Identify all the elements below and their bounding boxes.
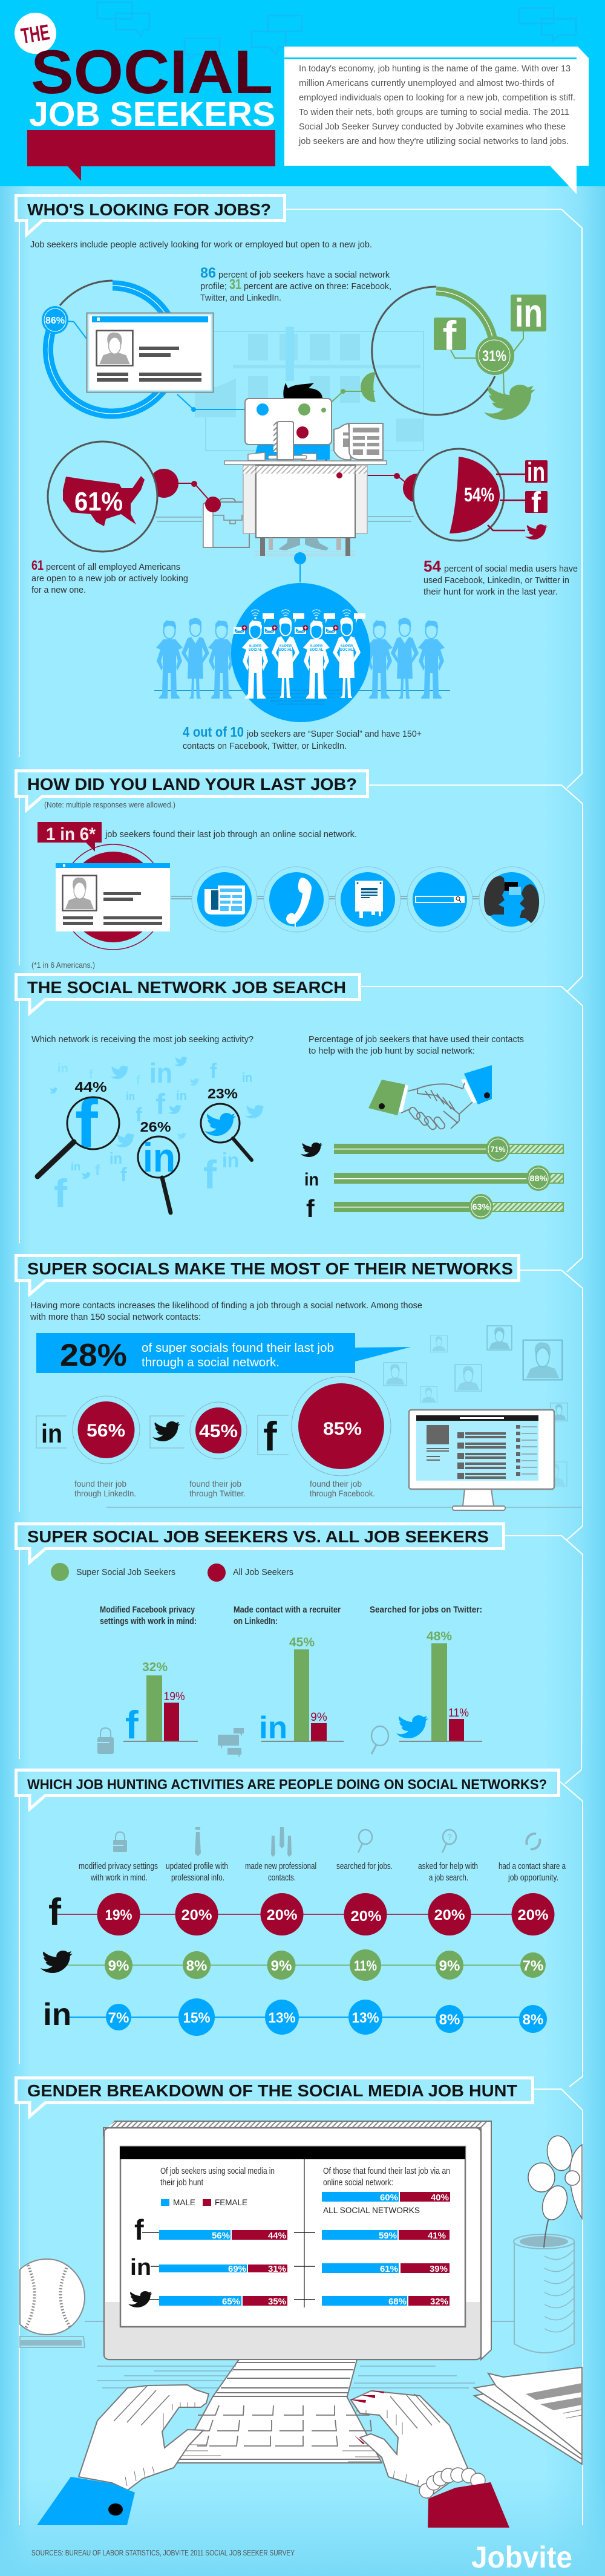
screen copy left — [160, 2167, 275, 2188]
title: the social job seekers: THE — [19, 19, 51, 48]
activity labels: professional info. — [171, 1873, 224, 1883]
legend: Super Social Job Seekers — [76, 1567, 175, 1577]
question: contacts: to help with the job hunt by social network: — [309, 1046, 475, 1056]
heading: who's looking for jobs — [16, 196, 284, 235]
61 percent stat text: 61 — [31, 558, 44, 573]
icon: linkedin red: in — [527, 457, 545, 487]
bar: linkedin 88 percent: 88% — [530, 1173, 548, 1183]
chart: twitter job search — [370, 1605, 482, 1754]
icon: magnifier with question mark — [442, 1830, 456, 1853]
row: twitter activities: 9% — [439, 1958, 460, 1974]
person at desk — [191, 383, 400, 556]
gender legend — [161, 2197, 247, 2207]
super social woman 1 — [264, 610, 304, 698]
scattered faint network icons: f — [89, 1068, 93, 1081]
chart: twitter job search: 48% — [427, 1629, 452, 1643]
86 percent stat text: 31 — [229, 276, 241, 293]
heading: super socials make the most of their networks: SUPER SOCIALS MAKE THE MOST OF THEIR NETWORKS — [27, 1259, 513, 1278]
icon: handshake — [368, 1065, 492, 1131]
header band — [0, 0, 605, 186]
intro callout: Social Job Seeker Survey conducted by Jobvite examines who these — [299, 122, 566, 132]
vase with flower — [514, 2133, 582, 2353]
activity labels — [79, 1861, 566, 1883]
54 percent stat text — [424, 557, 578, 597]
chart: linkedin recruiter: in — [259, 1710, 287, 1746]
super social man 2 — [295, 610, 335, 699]
chart: linkedin recruiter: 45% — [289, 1635, 315, 1649]
row: twitter gender: 65% — [222, 2297, 240, 2307]
row: linkedin gender: 39% — [430, 2264, 448, 2274]
callout: 28 percent: 28% — [60, 1338, 127, 1373]
callout: 1 in 6 — [38, 822, 357, 852]
heading: the social network job search — [16, 975, 359, 1013]
title: the social job seekers: SOCIAL — [31, 37, 273, 106]
row: facebook activities: 19% — [105, 1907, 132, 1923]
row: linkedin gender: in — [130, 2255, 151, 2280]
stat: facebook 85 percent: 85% — [323, 1419, 362, 1439]
briefcase — [203, 498, 250, 547]
icon: facebook green: f — [443, 313, 457, 359]
bar: twitter 71 percent — [301, 1136, 564, 1162]
scattered faint network icons: f — [136, 1104, 142, 1126]
super social figures — [154, 552, 450, 722]
left hand with blue cuff — [37, 2385, 209, 2525]
row: twitter activities — [41, 1949, 546, 1981]
54 percent stat text: used Facebook, LinkedIn, or Twitter in — [424, 575, 569, 585]
stat: linkedin 56 percent: 56% — [87, 1421, 125, 1441]
stat: linkedin 56 percent: in — [41, 1419, 62, 1449]
86 percent stat text: percent are active on three: Facebook, — [244, 281, 391, 292]
icon: search bar — [407, 867, 473, 932]
bar: linkedin 88 percent: in — [304, 1170, 319, 1190]
heading: gender breakdown — [16, 2078, 532, 2116]
question: which network: Which network is receiving the most job seeking activity? — [31, 1034, 253, 1045]
scattered faint network icons: in — [149, 1057, 172, 1089]
activity labels: asked for help with — [418, 1861, 478, 1871]
sources: SOURCES: BUREAU OF LABOR STATISTICS, JOBVITE 2011 SOCIAL JOB SEEKER SURVEY — [31, 2549, 295, 2557]
super socials intro: Having more contacts increases the likelihood of finding a job through a social network. Among those — [30, 1300, 422, 1311]
stat: facebook 85 percent: through Facebook. — [310, 1489, 375, 1498]
intro callout: In today's economy, job hunting is the name of the game. With over 13 — [299, 64, 571, 74]
magnifier: linkedin 26 percent — [138, 1119, 179, 1213]
scattered faint network icons: f — [95, 1162, 100, 1179]
profile card — [87, 313, 213, 392]
online social network profile card — [56, 844, 170, 950]
bar: facebook 63 percent: 63% — [472, 1202, 490, 1211]
activity icons — [113, 1827, 540, 1857]
super social man 2: SOCIAL — [310, 648, 324, 652]
shirt and hands — [248, 445, 330, 460]
4 out of 10 stat text: job seekers are “Super Social” and have 150+ — [246, 729, 422, 739]
chart: 86 percent ring — [42, 281, 176, 414]
chart: twitter job search: Searched for jobs on Twitter: — [370, 1605, 482, 1615]
scattered faint network icons: in — [71, 1161, 80, 1173]
bar: all social networks: ALL SOCIAL NETWORKS — [323, 2205, 420, 2215]
stat: facebook 85 percent: f — [263, 1414, 277, 1459]
activity labels: job opportunity. — [508, 1873, 558, 1883]
scattered faint network icons: in — [242, 1070, 252, 1085]
right hand with red cuff — [349, 2390, 509, 2528]
icon: padlock — [113, 1832, 127, 1852]
scattered faint network icons: f — [203, 1152, 217, 1197]
keyboard — [175, 2396, 382, 2463]
callout: 28 percent — [36, 1333, 411, 1373]
icon: two people talking — [479, 867, 544, 932]
chart: linkedin recruiter — [218, 1605, 344, 1758]
super social woman 2: SOCIAL — [340, 648, 354, 652]
chart: 54 percent ring — [403, 449, 548, 541]
chart: linkedin recruiter: 9% — [310, 1711, 327, 1724]
scattered faint network icons: f — [155, 1089, 166, 1121]
activity labels: modified privacy settings — [79, 1861, 158, 1871]
row: linkedin activities — [43, 1997, 547, 2036]
super socials intro: with more than 150 social network contacts: — [30, 1312, 201, 1322]
row: facebook activities: 20% — [182, 1907, 212, 1923]
connector dots around person — [164, 391, 413, 504]
faint contact avatars — [384, 1326, 567, 1486]
phone and paper — [334, 423, 383, 460]
scattered faint network icons: in — [126, 1091, 135, 1103]
row: facebook activities: 20% — [434, 1907, 465, 1923]
row: twitter activities: 7% — [523, 1958, 543, 1974]
icon: job flyer — [335, 867, 401, 932]
dots on monitor — [191, 389, 400, 512]
4 out of 10 stat text: 4 out of 10 — [183, 724, 244, 740]
bar: all social networks: 40% — [431, 2193, 449, 2203]
scattered faint network icons: in — [110, 1149, 122, 1167]
4 out of 10 stat text: contacts on Facebook, Twitter, or LinkedIn. — [183, 741, 347, 751]
question: contacts — [309, 1034, 524, 1056]
stat: linkedin 56 percent: through LinkedIn. — [74, 1489, 136, 1498]
heading: gender breakdown: GENDER BREAKDOWN OF THE SOCIAL MEDIA JOB HUNT — [27, 2081, 517, 2100]
chart: 61 percent map ring — [48, 442, 178, 552]
super socials intro — [30, 1300, 422, 1322]
gender legend: FEMALE — [215, 2197, 247, 2207]
row: linkedin gender — [130, 2255, 450, 2280]
61 percent stat text: percent of all employed Americans — [46, 562, 180, 572]
chart: twitter job search: 11% — [448, 1707, 469, 1720]
row: facebook activities: 20% — [351, 1908, 381, 1925]
scattered faint network icons: f — [120, 1164, 127, 1185]
chart: facebook privacy — [97, 1605, 198, 1754]
activity labels: updated profile with — [166, 1861, 228, 1871]
row: facebook activities: 20% — [266, 1907, 298, 1923]
stat: facebook 85 percent: found their job — [310, 1479, 362, 1489]
stat: twitter 45 percent: through Twitter. — [189, 1489, 246, 1498]
stat: linkedin 56 percent: found their job — [74, 1479, 126, 1489]
chart: 31 percent ring — [372, 287, 546, 420]
icon: magnifier with question mark: ? — [447, 1832, 452, 1842]
baseball trophy — [20, 2259, 85, 2347]
row: linkedin activities: in — [43, 1997, 71, 2032]
scattered faint network icons: f — [54, 1171, 68, 1216]
heading: which job hunting activities — [16, 1770, 559, 1809]
86 percent stat text: 86 — [200, 265, 216, 281]
row: linkedin activities: 13% — [352, 2010, 379, 2026]
magnifier: facebook 44 percent: 44% — [75, 1079, 106, 1095]
row: facebook gender — [134, 2214, 450, 2246]
bar: all social networks: 60% — [380, 2193, 398, 2203]
icon: twitter green — [484, 385, 535, 420]
row: twitter activities: 11% — [354, 1958, 377, 1974]
super social man 1: SUPER — [249, 645, 262, 648]
icon: padlock — [97, 1728, 114, 1754]
scattered faint network icons: in — [222, 1149, 239, 1172]
row: facebook gender: 44% — [268, 2231, 286, 2241]
61 percent stat text: for a new one. — [31, 585, 86, 595]
magnifier: twitter 23 percent: 23% — [208, 1086, 238, 1101]
newspaper stack — [474, 2367, 582, 2464]
icon: necktie — [195, 1827, 201, 1856]
super social man 1 — [234, 610, 274, 699]
stat: twitter 45 percent — [150, 1402, 247, 1498]
scattered faint network icons — [50, 1057, 264, 1216]
row: facebook activities: f — [48, 1891, 62, 1934]
row: twitter activities: 9% — [108, 1958, 129, 1974]
icon: magnifier — [371, 1726, 388, 1754]
heading: super socials make the most of their networks — [16, 1256, 519, 1294]
chart: facebook privacy: 32% — [142, 1660, 168, 1674]
magnifier: facebook 44 percent: f — [75, 1086, 98, 1162]
icon: linkedin green: in — [515, 290, 543, 335]
4 out of 10 stat text — [183, 724, 422, 751]
screen copy left: their job hunt — [160, 2178, 203, 2188]
activity labels: contacts. — [268, 1873, 296, 1883]
desk lines — [85, 2321, 514, 2322]
floor lines — [155, 517, 414, 521]
activity labels: made new professional — [245, 1861, 316, 1871]
callout: 28 percent: of super socials found their last job — [142, 1342, 334, 1355]
chart: facebook privacy: settings with work in mind: — [100, 1617, 197, 1626]
intro callout: million Americans currently unemployed and almost two-thirds of — [299, 79, 555, 88]
86 percent stat text — [200, 265, 391, 303]
super social woman 1: SOCIAL — [279, 648, 293, 652]
row: facebook activities — [48, 1891, 554, 1935]
86 percent stat text: percent of job seekers have a social network — [218, 270, 390, 280]
row: linkedin activities: 7% — [108, 2010, 129, 2026]
61 percent stat text — [31, 558, 188, 595]
chart: 31 percent ring: 31% — [482, 348, 506, 365]
super social man 2: SUPER — [310, 645, 323, 648]
scattered faint network icons: f — [210, 1060, 217, 1083]
heading: who's looking for jobs: WHO'S LOOKING FOR JOBS? — [27, 200, 271, 219]
screen copy right — [323, 2167, 450, 2188]
magnifier: facebook 44 percent — [38, 1079, 119, 1176]
icon: twitter red — [525, 524, 548, 540]
row: linkedin activities: 8% — [439, 2012, 460, 2028]
legend — [51, 1563, 293, 1582]
row: twitter gender — [128, 2291, 450, 2307]
activity labels: with work in mind. — [90, 1873, 148, 1883]
desktop monitor with profile — [409, 1410, 554, 1510]
callout: 1 in 6: 1 in 6* — [46, 824, 96, 844]
screen copy right: Of those that found their last job via an — [323, 2167, 450, 2176]
super social woman 2: SUPER — [341, 645, 353, 648]
title: the social job seekers: JOB SEEKERS — [29, 95, 275, 134]
chart: linkedin recruiter: on LinkedIn: — [234, 1617, 278, 1626]
row: twitter gender: 32% — [430, 2297, 448, 2307]
stat: twitter 45 percent: found their job — [189, 1479, 241, 1489]
row: linkedin gender: 31% — [268, 2264, 286, 2274]
footnote: (*1 in 6 Americans.) — [31, 960, 95, 970]
screen copy left: Of job seekers using social media in — [160, 2167, 275, 2176]
bar: linkedin 88 percent — [304, 1166, 564, 1191]
bar: facebook 63 percent: f — [306, 1195, 315, 1222]
scattered faint network icons: in — [176, 1088, 187, 1103]
super social man 1: SOCIAL — [249, 648, 263, 652]
row: linkedin activities: 15% — [183, 2010, 211, 2026]
monitor stand — [97, 2359, 475, 2396]
floor line — [106, 1507, 582, 1508]
row: twitter activities: 9% — [271, 1958, 292, 1974]
chart: facebook privacy: f — [125, 1703, 139, 1747]
chart: 61 percent map ring: 61% — [74, 487, 123, 517]
row: facebook gender: 59% — [379, 2231, 397, 2241]
54 percent stat text: percent of social media users have — [444, 564, 578, 574]
intro callout: job seekers are and how they're utilizing social networks to land jobs. — [298, 137, 569, 146]
intro sentence: Job seekers include people actively looking for work or employed but open to a new job. — [30, 240, 372, 250]
note: (Note: multiple responses were allowed.) — [44, 800, 175, 809]
activity labels: had a contact share a — [499, 1861, 566, 1871]
scattered faint network icons: in — [57, 1062, 68, 1075]
callout: 28 percent: through a social network. — [142, 1356, 280, 1369]
background building — [195, 327, 424, 451]
heading: how did you land your last job: HOW DID YOU LAND YOUR LAST JOB? — [27, 775, 357, 794]
gender legend: MALE — [173, 2197, 195, 2207]
chart: 54 percent ring: 54% — [464, 484, 494, 506]
row: linkedin activities: 13% — [269, 2010, 295, 2026]
logo: jobvite: Jobvite — [471, 2540, 572, 2574]
bar: all social networks — [322, 2192, 450, 2215]
61 percent stat text: are open to a new job or actively looking — [31, 573, 188, 584]
intro callout — [284, 47, 589, 194]
icon: three neckties — [271, 1827, 292, 1857]
row: facebook activities: 20% — [518, 1907, 548, 1923]
chart: 86 percent ring: 86% — [45, 316, 65, 326]
icon: telephone — [264, 867, 329, 932]
heading: which job hunting activities: WHICH JOB HUNTING ACTIVITIES ARE PEOPLE DOING ON SOCIAL NETWORKS? — [27, 1776, 547, 1792]
row: facebook gender: 41% — [428, 2231, 446, 2241]
row: linkedin gender: 61% — [380, 2264, 398, 2274]
monitor back — [245, 399, 332, 460]
row: facebook gender: f — [134, 2214, 144, 2246]
icon: facebook red: f — [531, 487, 541, 519]
row: twitter activities: 8% — [186, 1958, 207, 1974]
scattered faint network icons: f — [136, 1074, 140, 1087]
hair — [283, 383, 322, 399]
icon: facebook green — [434, 313, 466, 359]
bar: twitter 71 percent: 71% — [490, 1144, 506, 1154]
super social woman 2 — [325, 610, 365, 698]
icon: refresh — [526, 1834, 540, 1849]
title: the social job seekers — [15, 13, 275, 181]
heading: super social job seekers vs all job seekers — [16, 1524, 503, 1562]
magnifier: linkedin 26 percent: 26% — [140, 1119, 171, 1135]
bar: facebook 63 percent — [306, 1194, 564, 1222]
chart: facebook privacy: 19% — [163, 1691, 185, 1703]
86 percent stat text: profile; — [200, 281, 227, 292]
stat: twitter 45 percent: 45% — [199, 1421, 238, 1441]
connectors between job source icons — [171, 896, 479, 899]
heading: the social network job search: THE SOCIAL NETWORK JOB SEARCH — [27, 978, 346, 997]
large monitor — [103, 2121, 491, 2359]
stat: facebook 85 percent — [258, 1377, 391, 1498]
chart: linkedin recruiter: Made contact with a recruiter — [234, 1605, 341, 1615]
row: linkedin gender: 69% — [228, 2264, 246, 2274]
green connector node behind ring — [361, 372, 376, 402]
row: twitter gender: 68% — [388, 2297, 407, 2307]
desk — [224, 461, 387, 556]
chart: facebook privacy: Modified Facebook privacy — [100, 1605, 195, 1615]
magnifier: twitter 23 percent — [201, 1086, 252, 1160]
activity labels: searched for jobs. — [336, 1861, 393, 1871]
callout: 1 in 6: job seekers found their last job through an online social network. — [105, 829, 357, 840]
super social woman 1: SUPER — [280, 645, 292, 648]
screen copy right: online social network: — [323, 2178, 393, 2188]
heading: super social job seekers vs all job seekers: SUPER SOCIAL JOB SEEKERS VS. ALL JOB SEEKERS — [27, 1527, 489, 1546]
54 percent stat text: 54 — [424, 557, 442, 575]
magnifier: linkedin 26 percent: in — [143, 1135, 175, 1181]
icon: chat bubbles — [218, 1728, 244, 1758]
stat: linkedin 56 percent — [36, 1396, 140, 1498]
intro callout: employed individuals open to looking for a new job, competition is stiff. — [299, 93, 575, 103]
54 percent stat text: their hunt for work in the last year. — [424, 587, 558, 597]
86 percent stat text: Twitter, and LinkedIn. — [200, 293, 281, 303]
heading: how did you land your last job — [16, 771, 368, 810]
icon: newspaper — [192, 867, 257, 932]
intro callout: To widen their nets, both groups are turning to social media. The 2011 — [299, 108, 569, 117]
icon: facebook red — [525, 487, 548, 519]
row: facebook gender: 56% — [212, 2231, 230, 2241]
legend: All Job Seekers — [233, 1567, 293, 1577]
icon: magnifier — [358, 1830, 372, 1853]
activity labels: a job search. — [429, 1873, 468, 1883]
row: twitter gender: 35% — [268, 2297, 286, 2307]
question: contacts: Percentage of job seekers that have used their contacts — [309, 1034, 524, 1045]
row: linkedin activities: 8% — [523, 2012, 543, 2028]
